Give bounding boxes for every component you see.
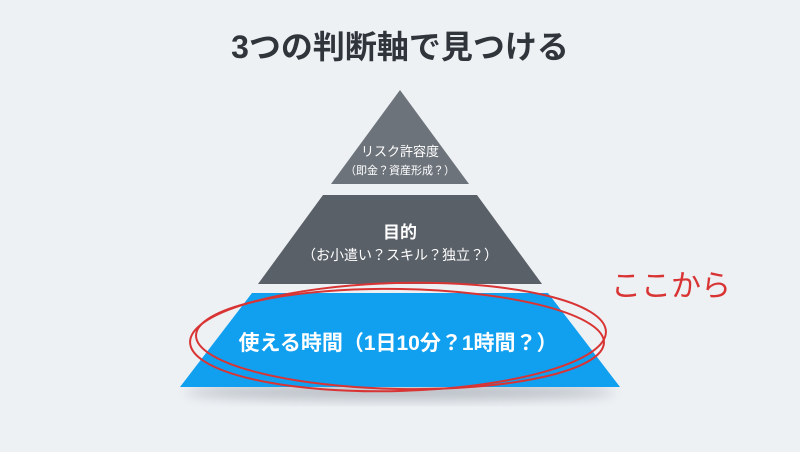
tier: available time xyxy=(180,293,620,387)
tier: risk tolerance: リスク許容度 xyxy=(361,144,439,159)
pyramid shadow xyxy=(185,384,615,400)
tier: purpose: 目的 xyxy=(383,223,417,242)
callout: ここから: ここから xyxy=(611,270,731,303)
red circle highlight xyxy=(189,278,607,396)
title: 3つの判断軸で見つける xyxy=(231,29,569,65)
tier: purpose: （お小遣い？スキル？独立？） xyxy=(302,247,498,263)
tier: risk tolerance: （即金？資産形成？） xyxy=(345,163,455,177)
tier: purpose xyxy=(258,195,542,284)
tier: available time: 使える時間（1日10分？1時間？） xyxy=(238,332,558,355)
tier: risk tolerance xyxy=(331,90,469,184)
